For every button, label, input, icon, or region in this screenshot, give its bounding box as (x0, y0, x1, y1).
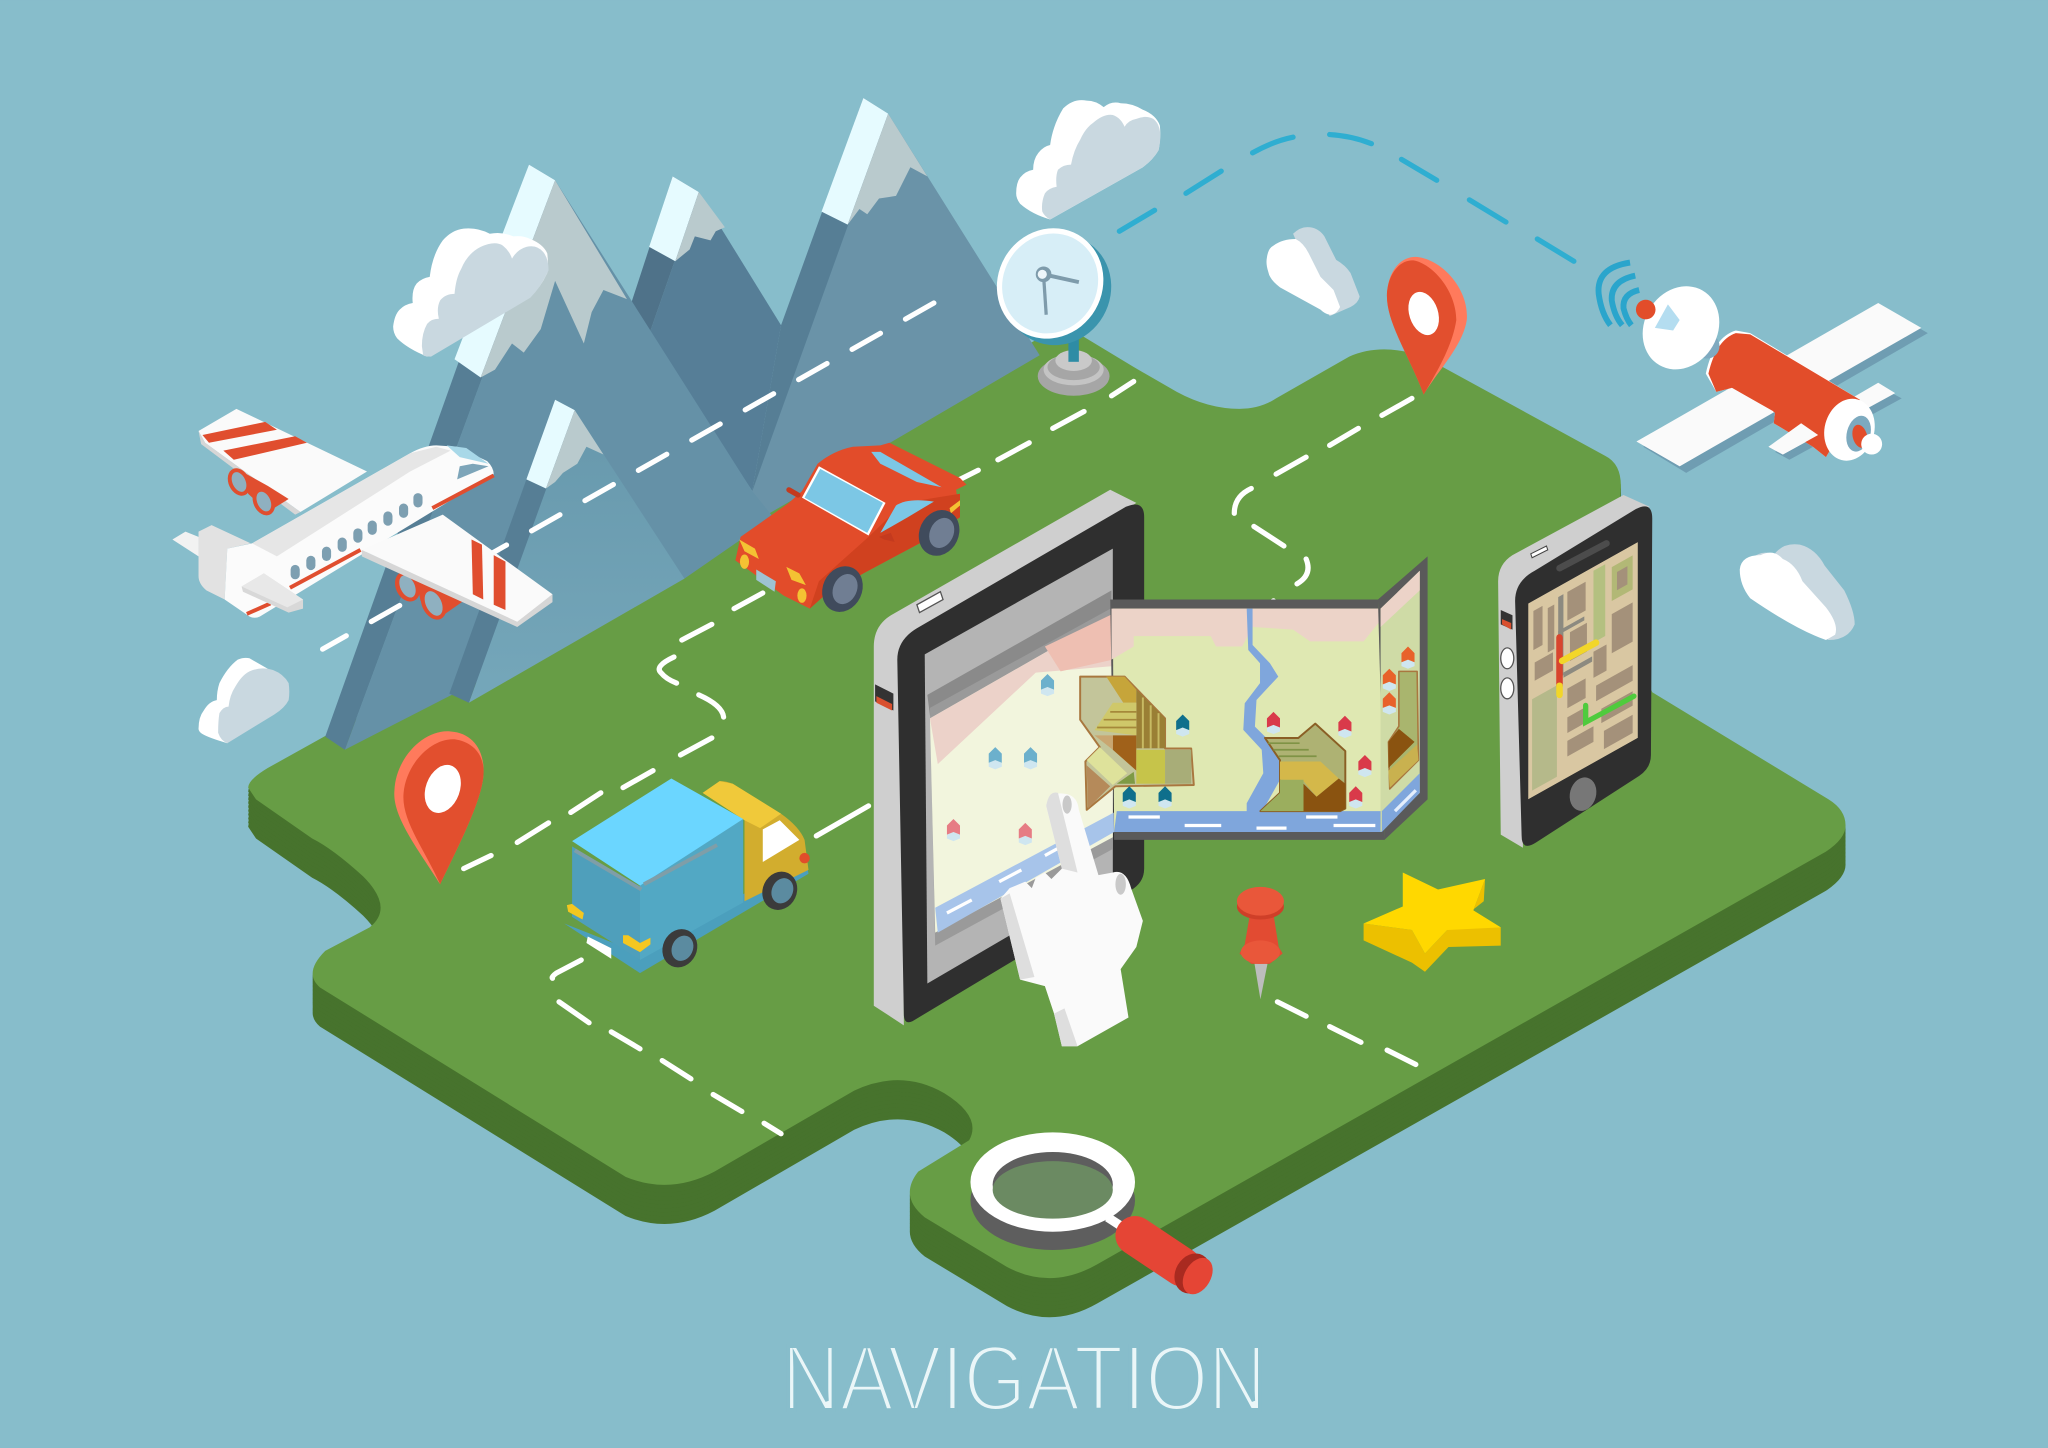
fields left (1080, 677, 1194, 810)
mountain: large left (325, 165, 773, 750)
tablet screen (925, 549, 1113, 984)
tail (172, 525, 251, 600)
engine ring (1817, 393, 1882, 466)
title: NAVIGATION (782, 1326, 1266, 1430)
tablet button (917, 592, 943, 613)
phone top button (1531, 546, 1548, 558)
mountain: back middle (630, 176, 781, 491)
gold star (1364, 873, 1501, 972)
phone route (1560, 637, 1634, 722)
delivery truck (564, 778, 810, 973)
phone home button (1566, 774, 1600, 814)
near wing (362, 515, 552, 627)
magnifying glass (970, 1132, 1219, 1300)
phone black body (1515, 506, 1652, 846)
red car (735, 443, 967, 619)
truck box (572, 846, 640, 960)
panel shadows (1643, 308, 1928, 473)
tablet black body (897, 504, 1144, 1022)
satellite body (1706, 330, 1860, 457)
solar panels rear (1637, 303, 1921, 466)
blue signal arc (1119, 135, 1574, 261)
fields on right fold (1388, 671, 1418, 789)
road dashes on board (464, 381, 1416, 1134)
car body (735, 443, 967, 609)
river (1243, 609, 1280, 812)
dashed road over mountains (323, 303, 934, 649)
cloud bottom left (199, 658, 289, 743)
phone silver frame (1498, 495, 1650, 848)
cloud top centre (1016, 100, 1160, 219)
fields right (1260, 724, 1345, 811)
smartphone (1498, 495, 1652, 848)
far wing (199, 409, 367, 519)
car wheels (911, 503, 967, 563)
fuselage (225, 445, 494, 618)
mountains (325, 98, 1040, 750)
phone speaker (1560, 543, 1607, 568)
car lights and plate (739, 500, 960, 603)
push pin (1237, 887, 1284, 999)
satellite dish (977, 209, 1131, 396)
cloud small centre (1267, 227, 1360, 316)
folding paper map (927, 556, 1428, 946)
truck base (564, 858, 808, 973)
signal waves (1599, 263, 1639, 325)
red map pin left (394, 731, 484, 884)
mountain: small front (449, 400, 684, 703)
airplane (172, 409, 552, 627)
truck lights and plate (567, 904, 584, 920)
truck wheels (756, 866, 803, 916)
map centre panel (1110, 600, 1384, 840)
tablet silver frame (874, 490, 1136, 1025)
cloud right (1740, 544, 1855, 640)
car mirrors (789, 490, 798, 495)
place markers (947, 647, 1415, 845)
solar panels front (1637, 388, 1774, 466)
elevator (242, 573, 303, 613)
tablet (874, 490, 1144, 1025)
green puzzle board (248, 332, 1846, 1317)
cloud near mountains (393, 228, 549, 357)
satellite dish head (1628, 272, 1734, 383)
tablet side switch (875, 684, 893, 711)
phone side buttons (1501, 610, 1514, 699)
lens (970, 1132, 1135, 1250)
phone map screen (1528, 542, 1638, 799)
map left panel (927, 590, 1114, 946)
red map pin right (1387, 257, 1467, 394)
mountain: large right (678, 98, 1040, 567)
car windows (802, 466, 886, 536)
dish bowl (977, 209, 1131, 365)
dish base (1038, 333, 1110, 396)
map right panel (1378, 556, 1428, 840)
truck cab (703, 781, 808, 901)
satellite (1599, 263, 1928, 473)
handle (1108, 1217, 1219, 1300)
pointing hand (1000, 792, 1143, 1046)
